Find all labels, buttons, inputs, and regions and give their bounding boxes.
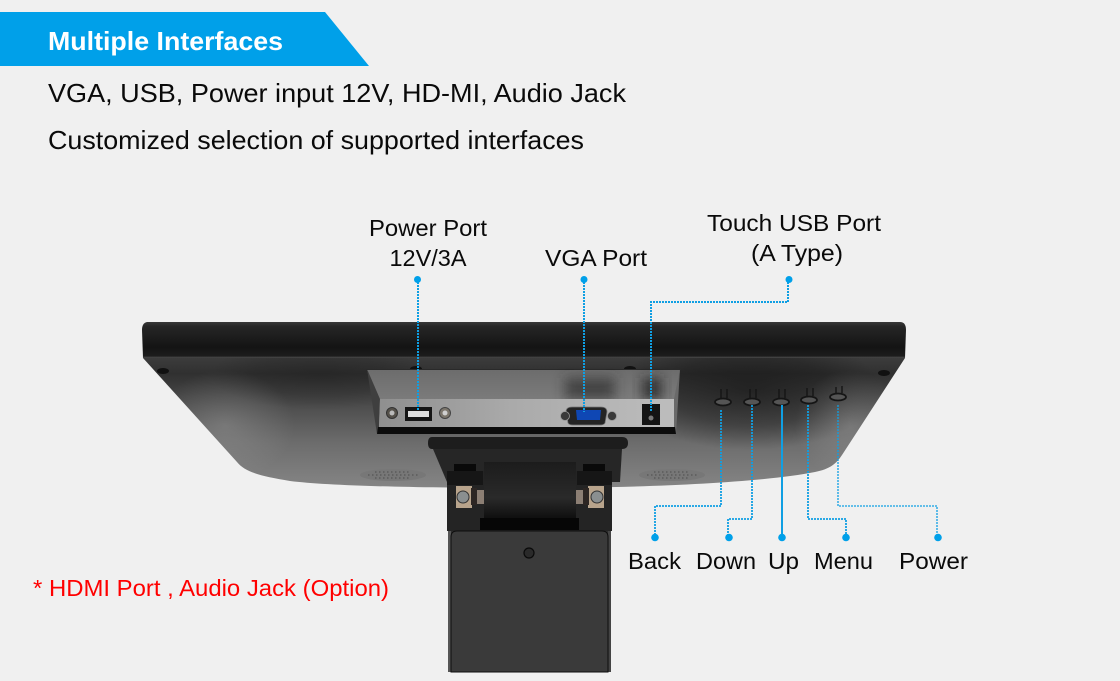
top callouts: [369, 210, 882, 412]
button labels: Back: [628, 548, 682, 574]
button labels: [628, 548, 968, 574]
label: power port: Power Port: [369, 215, 488, 241]
label: touch USB port: (A Type): [751, 240, 843, 266]
heading banner: Multiple Interfaces: [48, 26, 283, 56]
speaker right: [639, 469, 705, 481]
label: power port: [369, 215, 488, 271]
power jack: [642, 404, 660, 425]
corner holes: [157, 366, 890, 376]
stand cover: [451, 531, 608, 672]
button labels: Power: [899, 548, 968, 574]
button labels: Down: [696, 548, 756, 574]
connector lines: [418, 279, 788, 412]
label: VGA port: VGA Port: [545, 245, 648, 271]
intro text: VGA, USB, Power input 12V, HD-MI, Audio Jack: [48, 78, 627, 108]
speaker left: [360, 469, 426, 481]
stand: [448, 470, 611, 672]
VESA mount plate: [428, 437, 628, 482]
button callouts: [628, 405, 968, 574]
stand arm: [447, 462, 612, 531]
connector dots: [651, 534, 942, 541]
heading banner: [0, 12, 369, 66]
monitor photo: [142, 322, 906, 672]
hinge: [484, 462, 576, 522]
screw: [386, 408, 398, 418]
option note: * HDMI Port , Audio Jack (Option): [33, 575, 389, 601]
VGA port: [560, 407, 616, 425]
label: power port: 12V/3A: [390, 245, 467, 271]
monitor body: [143, 358, 905, 488]
buttons: [715, 386, 846, 406]
front bezel band: [142, 322, 906, 358]
connector dots: [414, 276, 792, 283]
hinge bolt left: [456, 486, 484, 508]
intro text: Customized selection of supported interfaces: [48, 125, 584, 155]
button labels: Up: [768, 548, 799, 574]
port bracket: [366, 369, 681, 434]
screw: [440, 408, 450, 418]
USB port: [405, 407, 432, 421]
intro text: [48, 78, 627, 155]
hinge bolt right: [576, 486, 604, 508]
label: touch USB port: Touch USB Port: [707, 210, 882, 236]
label: touch USB port: [707, 210, 882, 266]
button labels: Menu: [814, 548, 873, 574]
connector lines: [655, 405, 937, 537]
